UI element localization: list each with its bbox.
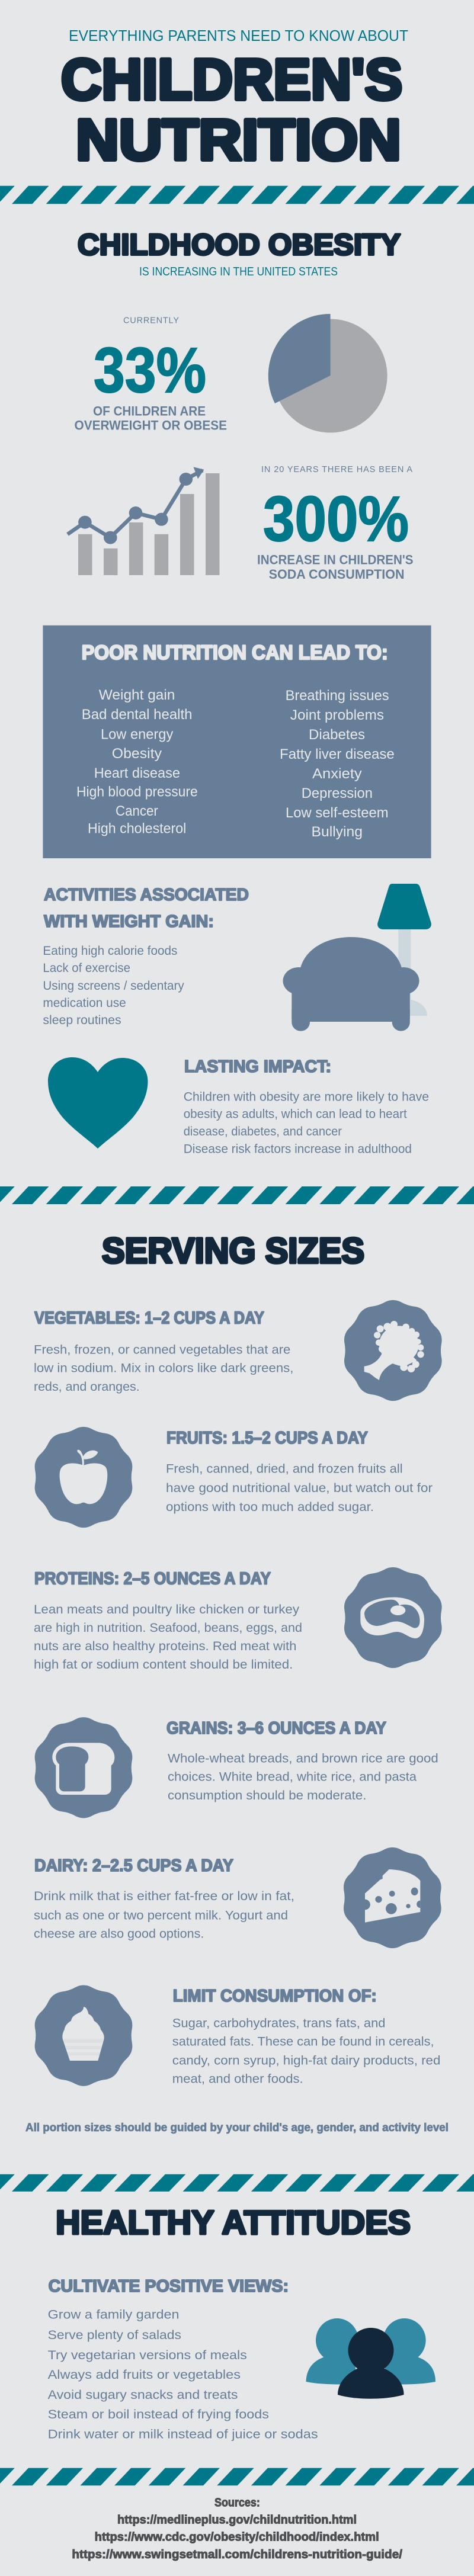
sources heading: Sources: [214, 2497, 260, 2510]
body text: options with too much added sugar. [166, 1500, 374, 1514]
body text: Drink milk that is either fat-free or low in fat, [34, 1889, 294, 1903]
heading: PROTEINS: 2–5 OUNCES A DAY [34, 1570, 271, 1589]
activity list: Lack of exercise [43, 961, 130, 975]
body text: such as one or two percent milk. Yogurt and [34, 1908, 288, 1922]
title line 2: NUTRITION [76, 108, 401, 172]
stripe divider 2 [0, 1186, 474, 1204]
block: limit consumption [172, 1987, 440, 2086]
body text: Fresh, frozen, or canned vegetables that are [34, 1343, 290, 1357]
activity list [43, 944, 184, 1027]
left list: Weight gain [99, 687, 175, 703]
stat: 300 percent [257, 465, 414, 582]
heading line 1: ACTIVITIES ASSOCIATED [44, 886, 249, 904]
block: cultivate positive views [48, 2277, 318, 2442]
list: Serve plenty of salads [48, 2328, 181, 2342]
caption line 2: SODA CONSUMPTION [269, 567, 405, 582]
label currently: CURRENTLY [123, 316, 179, 326]
list: Try vegetarian versions of meals [48, 2348, 247, 2362]
activity list: sleep routines [43, 1013, 121, 1027]
lamp pole and base [398, 929, 427, 1016]
body text: choices. White bread, white rice, and pasta [168, 1770, 417, 1784]
body text: Fresh, canned, dried, and frozen fruits all [166, 1462, 403, 1476]
number 33%: 33% [94, 334, 206, 406]
heading: VEGETABLES: 1–2 CUPS A DAY [34, 1309, 264, 1328]
label: IN 20 YEARS THERE HAS BEEN A [261, 465, 412, 474]
source 2: https://www.cdc.gov/obesity/childhood/index.html [95, 2530, 379, 2543]
body text: low in sodium. Mix in colors like dark greens, [34, 1361, 293, 1375]
left list [76, 687, 198, 837]
stripe divider 1 [0, 186, 474, 204]
body text: Children with obesity are more likely to have [184, 1090, 429, 1104]
block: lasting impact [184, 1057, 429, 1156]
body text [166, 1462, 433, 1514]
heading line 2: WITH WEIGHT GAIN: [44, 912, 214, 931]
caption line 1: OF CHILDREN ARE [93, 404, 206, 418]
right list: Anxiety [312, 766, 362, 782]
stat: 33 percent [75, 316, 227, 432]
number 300%: 300% [263, 483, 409, 554]
icon: cheese badge [344, 1847, 441, 1948]
right list [280, 688, 395, 840]
pie chart [268, 314, 387, 432]
icon: heart [48, 1057, 148, 1149]
body text: candy, corn syrup, high-fat dairy products, red [172, 2054, 440, 2068]
body text: Disease risk factors increase in adulthood [184, 1141, 412, 1156]
body text: obesity as adults, which can lead to heart [184, 1106, 407, 1121]
body text [34, 1343, 293, 1394]
block: activities associated with weight gain [43, 886, 249, 1027]
left list: Low energy [101, 726, 174, 742]
list: Drink water or milk instead of juice or sodas [48, 2427, 318, 2442]
right list: Low self-esteem [286, 805, 389, 821]
source 3: https://www.swingsetmall.com/childrens-nutrition-guide/ [72, 2548, 402, 2561]
stripe divider 4 [0, 2468, 474, 2485]
body text: cheese are also good options. [34, 1926, 204, 1940]
list: Grow a family garden [48, 2307, 179, 2321]
list [48, 2307, 318, 2442]
body text: have good nutritional value, but watch out for [166, 1481, 433, 1495]
33 percent slice [268, 314, 331, 403]
block: grains [166, 1719, 438, 1802]
sources [72, 2497, 402, 2561]
icon: broccoli badge [344, 1300, 442, 1401]
right list: Bullying [312, 824, 363, 840]
title line 1: CHILDREN'S [61, 47, 402, 111]
subheading: IS INCREASING IN THE UNITED STATES [139, 265, 338, 278]
sofa [283, 937, 419, 1031]
left list: High blood pressure [76, 784, 198, 800]
icon: steak badge [344, 1567, 442, 1668]
source 1: https://medlineplus.gov/childnutrition.html [117, 2513, 357, 2526]
heading: GRAINS: 3–6 OUNCES A DAY [166, 1719, 386, 1738]
activity list: medication use [43, 996, 126, 1010]
icon: lamp and sofa [283, 884, 431, 1031]
body text: high fat or sodium content should be limited. [34, 1657, 293, 1672]
icon: group of people [306, 2318, 435, 2399]
block: dairy [34, 1856, 294, 1940]
panel: poor nutrition [43, 625, 431, 858]
panel background [43, 625, 431, 858]
right list: Breathing issues [286, 688, 389, 704]
body text: Whole-wheat breads, and brown rice are good [168, 1751, 438, 1765]
caption line 2: OVERWEIGHT OR OBESE [75, 418, 227, 432]
heading: FRUITS: 1.5–2 CUPS A DAY [166, 1429, 368, 1448]
block: proteins [34, 1570, 302, 1672]
left list: Heart disease [94, 765, 180, 781]
heading: CHILDHOOD OBESITY [78, 228, 401, 261]
heading: LIMIT CONSUMPTION OF: [173, 1987, 377, 2006]
list: Avoid sugary snacks and treats [48, 2388, 238, 2402]
left list: Obesity [112, 746, 162, 762]
eyebrow heading: EVERYTHING PARENTS NEED TO KNOW ABOUT [69, 27, 408, 44]
body text [34, 1889, 294, 1940]
body text [172, 2016, 440, 2086]
stripe divider 3 [0, 2174, 474, 2192]
body text: saturated fats. These can be found in cereals, [172, 2035, 434, 2049]
body text: disease, diabetes, and cancer [184, 1124, 342, 1138]
body text: consumption should be moderate. [168, 1788, 366, 1802]
left list: High cholesterol [88, 821, 186, 837]
right list: Joint problems [290, 707, 384, 723]
body text: are high in nutrition. Seafood, beans, eggs, and [34, 1621, 302, 1635]
list: Always add fruits or vegetables [48, 2368, 241, 2382]
title block [61, 27, 408, 172]
body text: reds, and oranges. [34, 1380, 140, 1394]
body text [34, 1602, 302, 1672]
portion note: All portion sizes should be guided by your child's age, gender, and activity level [25, 2122, 449, 2134]
icon: bread badge [35, 1717, 132, 1818]
right list: Diabetes [309, 727, 365, 743]
body text: meat, and other foods. [172, 2071, 303, 2086]
heading: LASTING IMPACT: [184, 1057, 331, 1076]
activity list: Eating high calorie foods [43, 944, 177, 958]
left list: Cancer [116, 803, 158, 819]
section heading: childhood obesity [78, 228, 401, 278]
panel heading: POOR NUTRITION CAN LEAD TO: [82, 641, 388, 664]
right list: Depression [302, 785, 373, 801]
section heading: healthy attitudes: HEALTHY ATTITUDES [56, 2203, 411, 2241]
icon: cupcake badge [35, 1985, 132, 2086]
body text: Lean meats and poultry like chicken or turkey [34, 1602, 299, 1616]
heading: CULTIVATE POSITIVE VIEWS: [49, 2277, 289, 2296]
caption line 1: INCREASE IN CHILDREN'S [257, 553, 414, 567]
heading: DAIRY: 2–2.5 CUPS A DAY [34, 1856, 233, 1875]
icon: apple badge [35, 1427, 132, 1528]
block: vegetables [34, 1309, 293, 1394]
list: Steam or boil instead of frying foods [48, 2407, 269, 2421]
activity list: Using screens / sedentary [43, 979, 184, 993]
block: fruits [166, 1429, 433, 1514]
left list: Bad dental health [82, 707, 192, 723]
section heading: serving sizes: SERVING SIZES [102, 1231, 364, 1271]
right list: Fatty liver disease [280, 746, 395, 762]
body text [184, 1090, 429, 1156]
chart icon: rising bars and line [68, 467, 219, 575]
front figure [338, 2328, 404, 2399]
bars [78, 473, 219, 575]
body text: Sugar, carbohydrates, trans fats, and [172, 2016, 385, 2030]
lamp shade [377, 884, 431, 929]
body text [168, 1751, 438, 1802]
remaining share [274, 319, 387, 432]
back figures [306, 2318, 435, 2385]
trend line with arrow [68, 467, 204, 544]
body text: nuts are also healthy proteins. Red meat with [34, 1639, 296, 1653]
